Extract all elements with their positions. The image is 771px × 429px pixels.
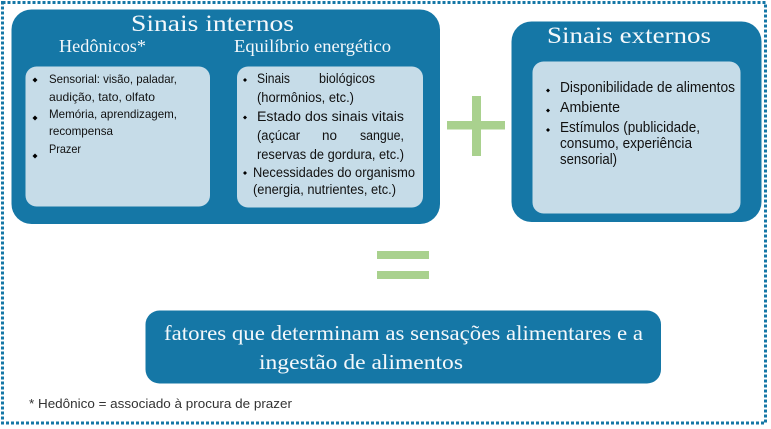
bullet xyxy=(32,154,38,158)
list item: estado dos sinais vitais: reservas de gordura, etc.) xyxy=(257,147,404,162)
list item: estado dos sinais vitais xyxy=(257,109,404,162)
panel: sinais externos xyxy=(512,22,762,222)
list item: estímulos: Estímulos (publicidade, xyxy=(560,119,700,136)
list item: estímulos xyxy=(560,119,700,168)
list item: memória xyxy=(49,107,177,138)
bullet xyxy=(243,116,247,120)
list item: disponibilidade: Disponibilidade de alimentos xyxy=(560,79,735,96)
bullet xyxy=(32,78,38,82)
list item: ambiente: Ambiente xyxy=(560,99,620,116)
list item: necessidades do organismo xyxy=(253,165,415,197)
bullet xyxy=(546,108,550,112)
list item: sensorial xyxy=(49,72,177,104)
bullet xyxy=(243,78,247,82)
card: equilíbrio energético list xyxy=(237,66,423,208)
bullet xyxy=(243,171,247,175)
card: hedônicos list xyxy=(26,66,210,206)
subheading: equilíbrio energético: Equilíbrio energético xyxy=(234,36,391,56)
list item: sinais biológicos: biológicos xyxy=(319,71,375,86)
list item: memória: Memória, aprendizagem, xyxy=(49,107,177,121)
footnote: * Hedônico = associado à procura de prazer xyxy=(29,397,292,411)
heading: sinais externos: Sinais externos xyxy=(547,23,711,48)
heading: sinais internos: Sinais internos xyxy=(131,11,294,36)
card: sinais externos list xyxy=(532,62,740,214)
list item: estímulos: sensorial) xyxy=(560,151,617,168)
icon: plus sign xyxy=(447,96,505,156)
list item: sinais biológicos xyxy=(257,71,375,105)
list item: estado dos sinais vitais: (açúcar xyxy=(257,128,300,143)
list item: sinais biológicos: Sinais xyxy=(257,71,290,86)
result box xyxy=(146,310,661,384)
list item: sinais biológicos: (hormônios, etc.) xyxy=(257,90,354,105)
result text: fatores que determinam as sensações alimentares e a xyxy=(164,321,644,345)
panel: sinais internos xyxy=(12,10,440,224)
subheading: hedônicos: Hedônicos* xyxy=(59,36,146,56)
list item: estímulos: consumo, experiência xyxy=(560,135,693,152)
list item: prazer: Prazer xyxy=(49,142,81,156)
list item: estado dos sinais vitais: no xyxy=(322,128,337,143)
result text: ingestão de alimentos xyxy=(259,350,463,374)
list item: sensorial: audição, tato, olfato xyxy=(49,90,155,104)
bullet xyxy=(32,116,38,120)
list item: necessidades do organismo: Necessidades do organismo xyxy=(253,165,415,180)
list item: estado dos sinais vitais: sangue, xyxy=(360,128,404,143)
bullet xyxy=(546,128,550,132)
list item: sensorial: Sensorial: visão, paladar, xyxy=(49,72,177,86)
list item: estado dos sinais vitais: Estado dos sinais vitais xyxy=(257,109,404,124)
list item: memória: recompensa xyxy=(49,124,113,138)
result text xyxy=(164,321,644,374)
icon: equals sign xyxy=(377,251,429,279)
bullet xyxy=(546,88,550,92)
list item: necessidades do organismo: (energia, nutrientes, etc.) xyxy=(253,182,396,197)
